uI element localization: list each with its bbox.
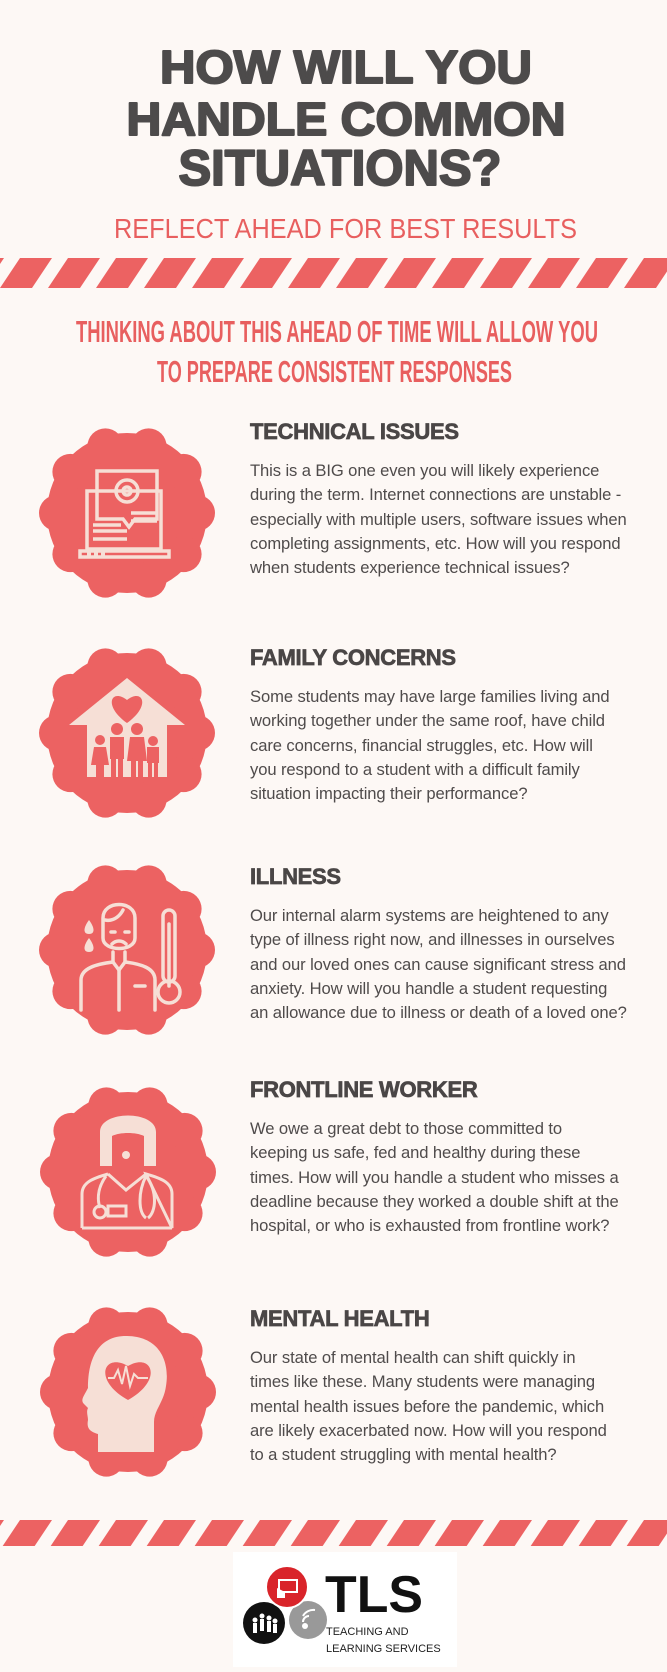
section: family concerns — [250, 645, 610, 803]
section: technical issues — [250, 419, 627, 577]
section: frontline worker: We owe a great debt to those committed to — [250, 1119, 562, 1138]
section: frontline worker: hospital, or who is exhausted from frontline work? — [250, 1216, 609, 1235]
icon: frontline worker badge — [40, 1087, 216, 1257]
subtitle: REFLECT AHEAD FOR BEST RESULTS — [114, 213, 577, 244]
section: family concerns: situation impacting their performance? — [250, 784, 528, 803]
section: mental health: MENTAL HEALTH — [250, 1306, 429, 1331]
section: technical issues: TECHNICAL ISSUES — [250, 419, 459, 444]
icon: family badge — [39, 648, 215, 818]
title: SITUATIONS? — [178, 140, 502, 196]
section: mental health: are likely exacerbated now. How will you respond — [250, 1421, 607, 1440]
section: mental health: mental health issues before the pandemic, which — [250, 1397, 604, 1416]
section: family concerns: care concerns, financial struggles, etc. How will — [250, 736, 593, 755]
title: HOW WILL YOU — [160, 41, 532, 93]
section: family concerns: working together under the same roof, have child — [250, 711, 605, 730]
section: illness: an allowance due to illness or death of a loved one? — [250, 1003, 627, 1022]
stripe band top — [0, 258, 667, 288]
logo: TLS — [233, 1552, 457, 1667]
section: technical issues: This is a BIG one even you will likely experience — [250, 461, 599, 480]
section: mental health: to a student struggling with mental health? — [250, 1445, 557, 1464]
title: HANDLE COMMON — [126, 93, 566, 145]
section: illness: type of illness right now, and illnesses in ourselves — [250, 930, 615, 949]
section: frontline worker: deadline because they worked a double shift at the — [250, 1192, 619, 1211]
section: family concerns: Some students may have large families living and — [250, 687, 610, 706]
icon: technical issues badge — [39, 428, 215, 598]
section: frontline worker: times. How will you handle a student who misses a — [250, 1168, 619, 1187]
icon: illness badge — [39, 865, 215, 1035]
section: technical issues: during the term. Internet connections are unstable - — [250, 485, 621, 504]
intro heading — [76, 314, 598, 389]
section: technical issues: especially with multiple users, software issues when — [250, 510, 627, 529]
section: frontline worker — [250, 1077, 619, 1235]
logo: TLS: TEACHING AND — [326, 1626, 409, 1638]
section: illness: anxiety. How will you handle a student requesting — [250, 979, 607, 998]
section: technical issues: completing assignments, etc. How will you respond — [250, 534, 620, 553]
section: family concerns: you respond to a student with a difficult family — [250, 760, 580, 779]
section: illness: ILLNESS — [250, 864, 341, 889]
logo: TLS: TLS — [325, 1566, 423, 1624]
section: frontline worker: keeping us safe, fed and healthy during these — [250, 1143, 580, 1162]
section: technical issues: when students experience technical issues? — [250, 558, 570, 577]
icon: mental health badge — [40, 1307, 216, 1477]
section: illness: and our loved ones can cause significant stress and — [250, 955, 626, 974]
title — [126, 41, 566, 196]
stripe band bottom — [0, 1520, 667, 1546]
section: illness — [250, 864, 627, 1022]
section: frontline worker: FRONTLINE WORKER — [250, 1077, 477, 1102]
logo: TLS: LEARNING SERVICES — [326, 1643, 441, 1655]
section: family concerns: FAMILY CONCERNS — [250, 645, 456, 670]
section: mental health: Our state of mental health can shift quickly in — [250, 1348, 576, 1367]
section: mental health — [250, 1306, 607, 1464]
section: mental health: times like these. Many students were managing — [250, 1372, 595, 1391]
section: illness: Our internal alarm systems are heightened to any — [250, 906, 609, 925]
